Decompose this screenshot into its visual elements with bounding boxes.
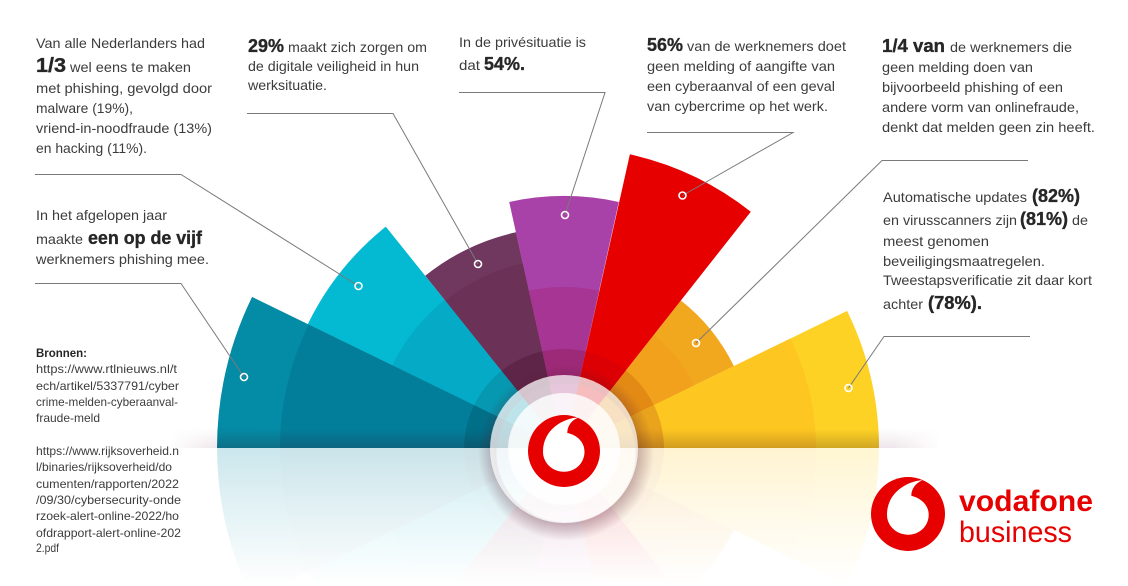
- text block: 56%: van cybercrime op het werk.: [647, 98, 828, 114]
- text block: 54%: [459, 34, 586, 74]
- text block: sources: rzoek-alert-online-2022/ho: [36, 509, 179, 523]
- text block: 1/3 Nederlanders: wel eens te maken: [69, 59, 191, 75]
- text block: updates and virusscanners: achter: [883, 296, 923, 312]
- text block: sources: crime-melden-cyberaanval-: [36, 395, 178, 409]
- text block: sources: https://www.rijksoverheid.n: [36, 444, 179, 458]
- text block: 1/4 van: bijvoorbeeld phishing of een: [882, 79, 1063, 95]
- text block: sources: l/binaries/rijksoverheid/do: [36, 460, 172, 474]
- wedge: magenta: [509, 196, 619, 416]
- text block: 1/3 Nederlanders: en hacking (11%).: [36, 140, 147, 156]
- wedge: cyan: [308, 226, 542, 434]
- text block: 1/4 van: [882, 36, 1095, 135]
- vodafone business logo: vodafone: [959, 485, 1093, 518]
- text block: een op de vijf: werknemers phishing mee.: [35, 251, 209, 267]
- text block: 1/3 Nederlanders: malware (19%),: [36, 100, 133, 116]
- leader line and marker: 29%: [247, 114, 482, 268]
- text block: updates and virusscanners: (81%): [1020, 209, 1068, 229]
- text block: 56%: van de werknemers doet: [687, 38, 846, 54]
- text block: sources: /09/30/cybersecurity-onde: [36, 493, 181, 507]
- text block: 1/3 Nederlanders: 1/3: [36, 55, 66, 77]
- text block: een op de vijf: een op de vijf: [88, 228, 203, 248]
- text block: sources: 2.pdf: [36, 541, 60, 555]
- leader line and marker: phishing werknemers: [35, 284, 248, 380]
- leader line and marker: updates: [845, 336, 1030, 392]
- text block: updates and virusscanners: beveiligingsmaatregelen.: [883, 253, 1045, 269]
- text block: updates and virusscanners: de: [1072, 212, 1088, 228]
- text block: updates and virusscanners: Automatische updates: [883, 189, 1027, 205]
- text block: 56%: een cyberaanval of een geval: [647, 78, 835, 94]
- wedge: dark purple: [425, 232, 556, 422]
- text block: 1/3 Nederlanders: Van alle Nederlanders had: [36, 35, 205, 51]
- centre disc with logo: [478, 365, 654, 541]
- text block: 1/4 van: 1/4 van: [882, 36, 945, 56]
- wedge: teal: [217, 297, 564, 449]
- leader line and marker: 56%: [647, 132, 793, 199]
- text block: updates and virusscanners: (82%): [1032, 186, 1080, 206]
- vodafone business logo: business: [959, 516, 1072, 549]
- text block: 1/4 van: geen melding doen van: [882, 59, 1033, 75]
- text block: updates and virusscanners: meest genomen: [883, 233, 989, 249]
- text block: 56%: [647, 35, 846, 114]
- text block: updates and virusscanners: Tweestapsverificatie zit daar kort: [883, 272, 1092, 288]
- text block: 29%: de digitale veiligheid in hun: [248, 58, 419, 74]
- text block: 29%: maakt zich zorgen om: [288, 39, 427, 55]
- text block: sources: ofdrapport-alert-online-202: [36, 526, 181, 540]
- text block: 1/4 van: andere vorm van onlinefraude,: [882, 99, 1079, 115]
- text block: sources: cumenten/rapporten/2022: [36, 477, 179, 491]
- text block: 29%: [247, 36, 427, 93]
- text block: 54%: In de privésituatie is: [459, 34, 586, 50]
- text block: updates and virusscanners: [883, 186, 1092, 313]
- wedge: yellow: [596, 310, 879, 448]
- text block: 54%: 54%.: [484, 54, 525, 74]
- text block: updates and virusscanners: (78%).: [928, 293, 982, 313]
- text block: sources: ech/artikel/5337791/cyber: [36, 379, 179, 393]
- text block: updates and virusscanners: en virusscanners zijn: [883, 212, 1017, 228]
- leader line and marker: 1/4: [692, 160, 1028, 346]
- text block: 54%: dat: [459, 57, 480, 73]
- text block: sources: fraude-meld: [36, 411, 100, 425]
- text block: 1/3 Nederlanders: vriend-in-noodfraude (13%): [36, 120, 212, 136]
- text block: een op de vijf: [35, 207, 209, 267]
- text block: 56%: geen melding of aangifte van: [647, 58, 835, 74]
- text block: sources: Bronnen:: [36, 346, 87, 360]
- horizon shading band: [186, 432, 924, 448]
- mirrored reflection of the fan: [217, 448, 879, 563]
- wedge: red: [572, 154, 751, 422]
- text block: 1/4 van: denkt dat melden geen zin heeft.: [882, 119, 1095, 135]
- vodafone business logo: [871, 477, 1093, 551]
- leader line and marker: 1/3 Nederlanders: [35, 174, 362, 290]
- text block: een op de vijf: In het afgelopen jaar: [36, 207, 167, 223]
- text block: sources: [36, 346, 181, 555]
- text block: 1/3 Nederlanders: met phishing, gevolgd door: [36, 80, 212, 96]
- text block: 56%: 56%: [647, 35, 683, 55]
- text block: een op de vijf: maakte: [36, 231, 83, 247]
- wedge: orange: [586, 300, 734, 434]
- text block: 29%: 29%: [248, 36, 284, 56]
- text block: 1/4 van: de werknemers die: [950, 39, 1072, 55]
- text block: 29%: werksituatie.: [247, 77, 327, 93]
- leader line and marker: 54%: [459, 92, 605, 218]
- text block: 1/3 Nederlanders: [36, 35, 212, 156]
- fan chart of coloured wedges: [217, 154, 879, 449]
- text block: sources: https://www.rtlnieuws.nl/t: [36, 362, 178, 376]
